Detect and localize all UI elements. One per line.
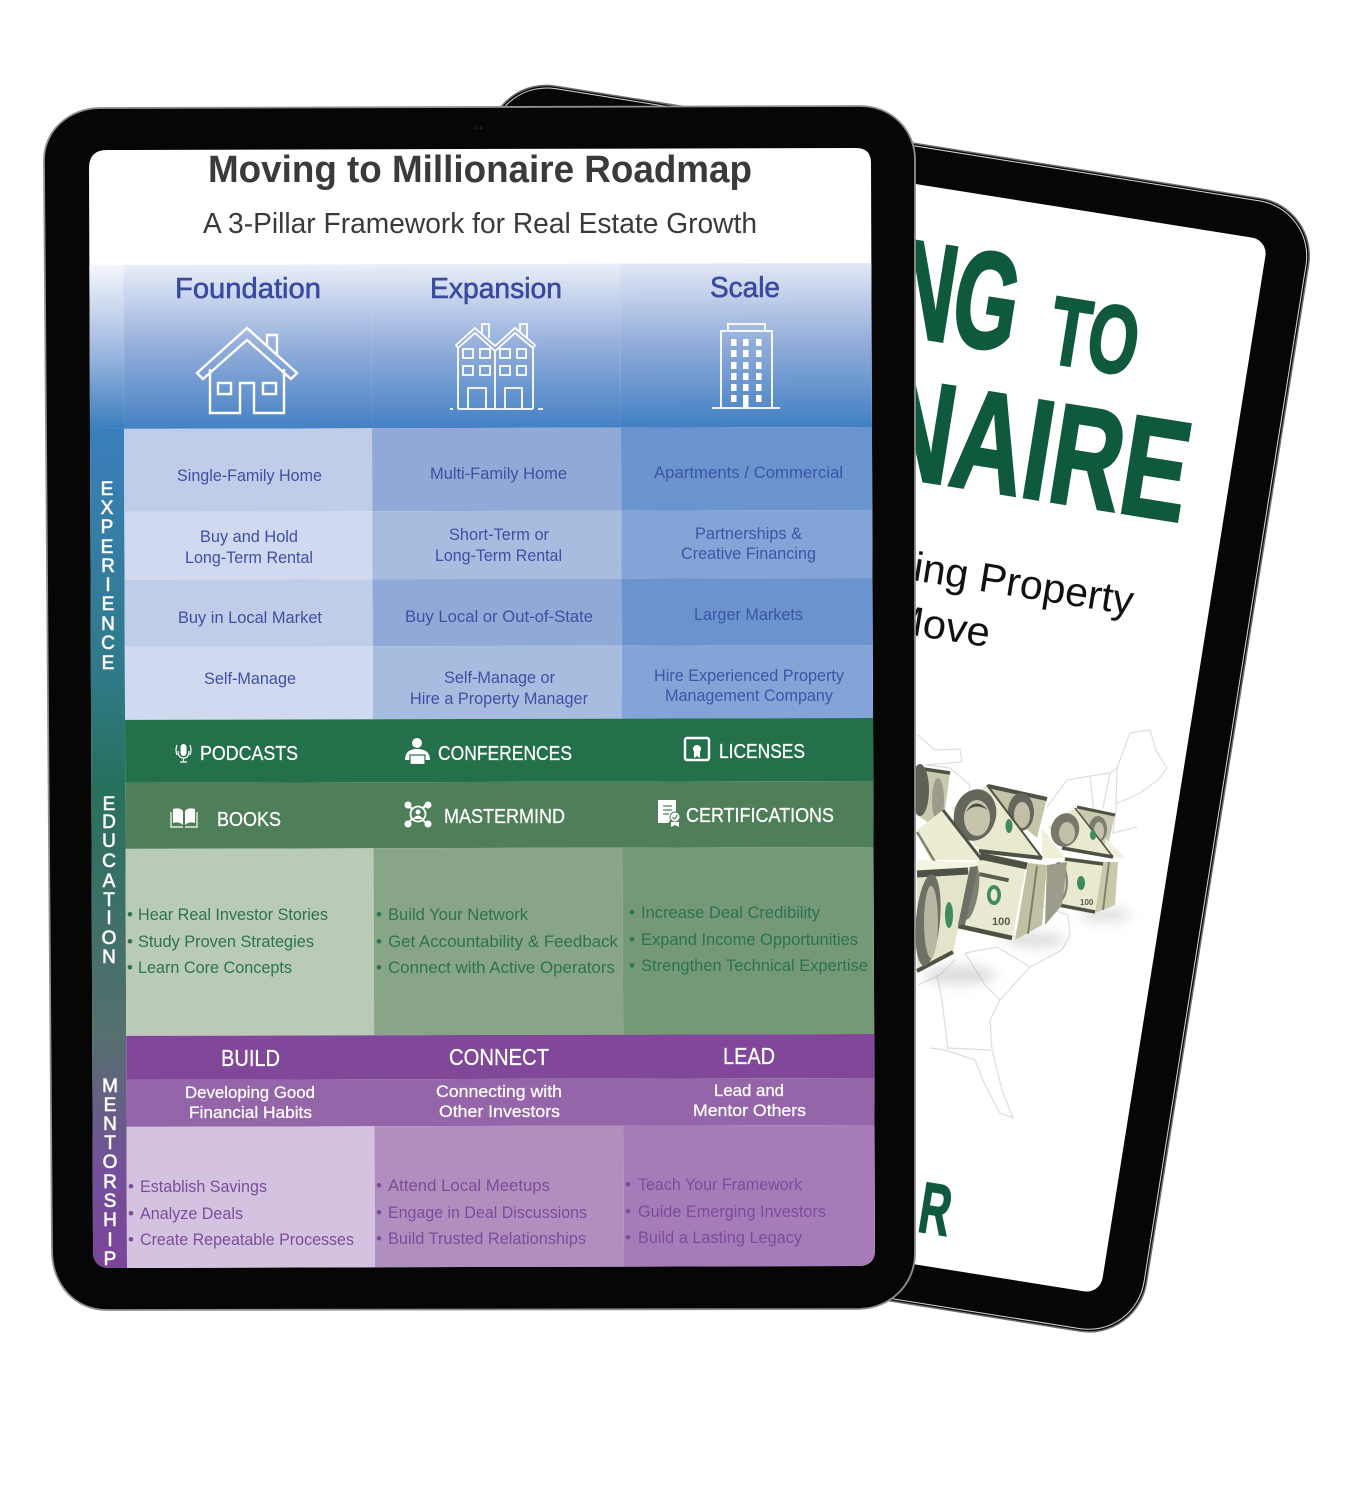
mentorship bullets: Connect: Attend Local Meetups <box>388 1176 550 1195</box>
education bullets: Expansion: Connect with Active Operators <box>388 958 615 977</box>
icon: multi-family building <box>450 324 543 409</box>
side label: MENTORSHIP: R <box>103 1172 117 1193</box>
experience: Foundation column text: Long-Term Rental <box>185 548 313 567</box>
side label: EDUCATION: E <box>103 794 115 815</box>
experience: Expansion column text: Buy Local or Out-of-State <box>405 607 593 626</box>
education bullets: Expansion: • <box>376 905 382 924</box>
icon: apartment tower <box>712 324 780 408</box>
icon: certification document <box>658 800 680 827</box>
mentorship subheads: Other Investors <box>439 1102 560 1121</box>
education bullets: Scale: • <box>629 903 635 922</box>
map outline of the eastern US <box>918 730 1167 1118</box>
subtitle: A 3-Pillar Framework for Real Estate Growth <box>203 208 757 240</box>
icon: conference speaker <box>405 738 430 764</box>
side label: EXPERIENCE: X <box>101 498 114 519</box>
education bullets: Scale: • <box>629 956 635 975</box>
front camera <box>476 127 482 129</box>
experience: Foundation column text: Self-Manage <box>204 669 296 688</box>
experience: Expansion column text: Hire a Property Manager <box>410 689 588 708</box>
side label: EDUCATION: I <box>106 908 112 929</box>
back tablet frame <box>318 77 1318 1340</box>
side label: EXPERIENCE: P <box>101 517 113 538</box>
experience: Scale column text: Creative Financing <box>681 544 816 563</box>
experience: Scale column text: Hire Experienced Property <box>654 666 844 685</box>
education bullets: Scale: Increase Deal Credibility <box>641 903 820 922</box>
side label: EXPERIENCE: C <box>101 633 115 654</box>
experience: Scale column text: Management Company <box>665 686 833 705</box>
side label: EXPERIENCE: R <box>101 556 115 577</box>
back cover subtitle <box>886 543 1138 656</box>
side label: EDUCATION: U <box>102 831 116 852</box>
icon: money house left <box>911 764 986 973</box>
mentorship bullets: Lead: • <box>625 1175 631 1194</box>
education bullets: Foundation: • <box>127 958 133 977</box>
side label: EDUCATION: T <box>103 890 115 911</box>
back cover subtitle: Move <box>886 594 994 656</box>
mentorship bullets: Lead: Teach Your Framework <box>638 1175 802 1194</box>
mentorship heading: BUILD: BUILD <box>221 1045 280 1071</box>
mentorship subheads: Developing Good <box>185 1083 315 1102</box>
back cover title: MILLIONAIRE <box>538 293 1201 552</box>
pillar header: Expansion: Expansion <box>430 273 562 305</box>
side label: MENTORSHIP: N <box>103 1114 117 1135</box>
education item: BOOKS: BOOKS <box>217 809 281 831</box>
side label: EDUCATION: O <box>102 928 116 949</box>
education bullets: Expansion: • <box>376 932 382 951</box>
side label: MENTORSHIP: M <box>102 1076 118 1097</box>
experience: Scale column text <box>654 463 844 705</box>
education bullets: Expansion: • <box>376 958 382 977</box>
mentorship subheads: Lead and <box>714 1081 784 1100</box>
education item: CONFERENCES: CONFERENCES <box>438 743 572 765</box>
mentorship bullets: Lead: Build a Lasting Legacy <box>638 1228 802 1247</box>
education bullets: Foundation: Hear Real Investor Stories <box>138 905 328 924</box>
front screen <box>85 144 881 1276</box>
side label: MENTORSHIP: S <box>104 1191 116 1212</box>
side label: EXPERIENCE: E <box>101 479 113 500</box>
back cover title: TO <box>1043 277 1146 397</box>
icon: money house middle <box>948 784 1067 940</box>
education item: LICENSES: LICENSES <box>719 741 805 763</box>
education bullets: Foundation: • <box>127 905 133 924</box>
side label: EDUCATION: C <box>102 851 116 872</box>
front tablet frame <box>44 106 915 1310</box>
experience: Foundation column text <box>177 466 322 688</box>
icon: single-family house <box>197 328 297 413</box>
back cover title <box>538 177 1201 552</box>
experience: Foundation column text: Buy and Hold <box>200 527 298 546</box>
icon: money house right <box>1047 807 1125 913</box>
mentorship subheads: Mentor Others <box>693 1101 806 1120</box>
title: Moving to Millionaire Roadmap <box>208 149 752 191</box>
mentorship bullets: Build: • <box>128 1177 134 1196</box>
side label: EXPERIENCE: I <box>105 575 111 596</box>
side label: MENTORSHIP: E <box>104 1095 116 1116</box>
education bullets: Scale: Strengthen Technical Expertise <box>641 956 868 975</box>
mentorship subheads <box>186 1084 806 1118</box>
icon: license certificate <box>685 738 709 760</box>
experience: Scale column text: Partnerships & <box>695 524 803 543</box>
education bullets: Expansion: Get Accountability & Feedback <box>388 932 618 951</box>
side label: EDUCATION <box>102 794 116 968</box>
back tablet <box>318 77 1318 1340</box>
side label: EXPERIENCE <box>101 479 115 674</box>
mentorship bullets: Build: Analyze Deals <box>140 1204 243 1223</box>
experience: Scale column text: Apartments / Commercial <box>654 463 843 482</box>
side label: EDUCATION: A <box>103 871 116 892</box>
back cover author initial: R <box>914 1166 957 1252</box>
experience: Expansion column text: Short-Term or <box>449 525 549 544</box>
icon: mastermind network <box>404 802 432 828</box>
education item: PODCASTS: PODCASTS <box>200 743 298 765</box>
side label: EXPERIENCE: E <box>102 594 114 615</box>
mentorship bullets: Connect: • <box>376 1229 382 1248</box>
house shadows <box>924 909 1131 984</box>
side label: EXPERIENCE: N <box>101 614 115 635</box>
education item: CERTIFICATIONS: CERTIFICATIONS <box>686 805 834 827</box>
mentorship bullets: Build <box>128 1177 354 1249</box>
icon: money house right: 100 <box>1080 898 1094 907</box>
mentorship subheads: Connecting with <box>436 1082 562 1101</box>
mentorship bullets: Build: Create Repeatable Processes <box>140 1230 354 1249</box>
pillar header: Foundation: Foundation <box>175 273 321 305</box>
experience: Expansion column text <box>405 464 593 708</box>
pillar header: Scale: Scale <box>710 272 780 304</box>
experience: Foundation column text: Buy in Local Market <box>178 608 322 627</box>
side label: EXPERIENCE: E <box>102 653 114 674</box>
side label: MENTORSHIP: P <box>104 1249 116 1270</box>
education bullets: Scale <box>629 903 868 975</box>
experience: Expansion column text: Self-Manage or <box>444 668 555 687</box>
education item: MASTERMIND: MASTERMIND <box>444 806 565 828</box>
mentorship bullets: Connect: • <box>376 1176 382 1195</box>
experience: Expansion column text: Long-Term Rental <box>435 546 562 565</box>
education bullets: Scale: Expand Income Opportunities <box>641 930 858 949</box>
side label: EXPERIENCE: E <box>101 537 113 558</box>
side label: MENTORSHIP: I <box>107 1230 113 1251</box>
mentorship heading: LEAD: LEAD <box>723 1043 775 1069</box>
experience: Foundation column text: Single-Family Home <box>177 466 322 485</box>
education bullets: Expansion <box>376 905 618 977</box>
back cover title: MOVING <box>677 177 1030 381</box>
mentorship bullets: Build: • <box>128 1204 134 1223</box>
icon: open book <box>171 808 197 827</box>
mentorship bullets: Connect: • <box>376 1203 382 1222</box>
education bullets: Foundation <box>127 905 328 977</box>
mentorship subheads: Financial Habits <box>189 1103 312 1122</box>
mentorship bullets: Build: • <box>128 1230 134 1249</box>
mentorship bullets: Build: Establish Savings <box>140 1177 267 1196</box>
experience: Expansion column text: Multi-Family Home <box>430 464 567 483</box>
mentorship bullets: Lead: • <box>625 1202 631 1221</box>
mentorship bullets: Lead: Guide Emerging Investors <box>638 1202 826 1221</box>
back cover subtitle: ing Property <box>911 543 1138 624</box>
education bullets: Foundation: Learn Core Concepts <box>138 958 292 977</box>
education bullets: Scale: • <box>629 930 635 949</box>
side label: MENTORSHIP: O <box>103 1152 117 1173</box>
experience: Scale column text: Larger Markets <box>694 605 803 624</box>
mentorship bullets: Connect: Engage in Deal Discussions <box>388 1203 587 1222</box>
screen background and grid cells <box>85 144 881 1276</box>
icon: money house middle: 100 <box>992 916 1010 928</box>
education bullets: Expansion: Build Your Network <box>388 905 528 924</box>
side label: EDUCATION: N <box>102 947 116 968</box>
mentorship bullets: Connect <box>376 1176 587 1248</box>
mentorship bullets: Lead <box>625 1175 826 1247</box>
side label: MENTORSHIP: H <box>103 1210 117 1231</box>
side label: EDUCATION: D <box>102 812 116 833</box>
mentorship heading: CONNECT: CONNECT <box>449 1044 549 1070</box>
mentorship bullets: Connect: Build Trusted Relationships <box>388 1229 586 1248</box>
education bullets: Foundation: Study Proven Strategies <box>138 932 314 951</box>
side label: MENTORSHIP: T <box>104 1133 116 1154</box>
side label: MENTORSHIP <box>103 1078 117 1266</box>
mentorship bullets: Lead: • <box>625 1228 631 1247</box>
education bullets: Foundation: • <box>127 932 133 951</box>
icon: podcast microphone <box>176 744 191 762</box>
